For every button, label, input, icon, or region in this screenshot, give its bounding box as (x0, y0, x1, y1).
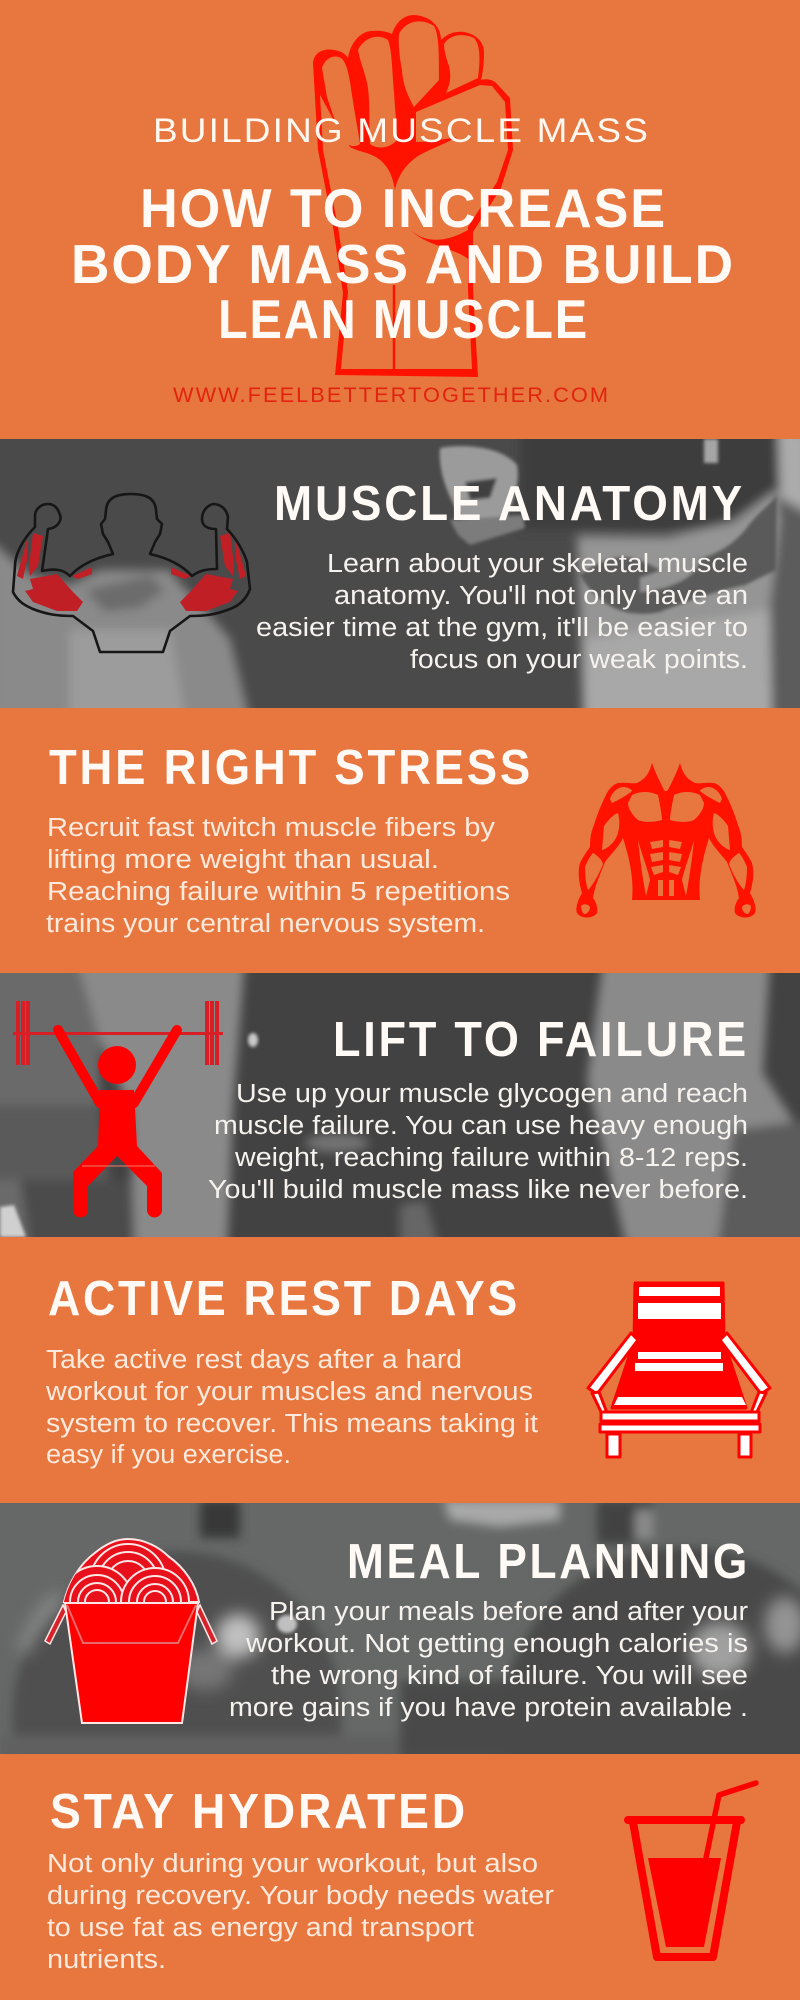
icon: raised fist (313, 15, 513, 377)
heading: ACTIVE REST DAYS (48, 1272, 520, 1326)
body text: Plan your meals before and after your (269, 1598, 749, 1626)
panel: meal planning (0, 1503, 800, 1754)
title: BODY MASS AND BUILD (71, 233, 735, 295)
body text (47, 1850, 555, 1974)
body text: weight, reaching failure within 8-12 reps. (234, 1144, 748, 1172)
body text: focus on your weak points. (410, 646, 748, 674)
body text: during recovery. Your body needs water (47, 1882, 555, 1910)
body text: Recruit fast twitch muscle fibers by (47, 814, 495, 842)
body text: lifting more weight than usual. (47, 846, 439, 874)
body text (45, 1346, 538, 1469)
icon: red bodybuilder (576, 763, 756, 918)
body text (229, 1598, 749, 1722)
background photo: gym shirt (0, 439, 800, 708)
body text: muscle failure. You can use heavy enough (214, 1112, 748, 1140)
body text (46, 814, 510, 938)
panel: the right stress (46, 741, 756, 938)
body text: more gains if you have protein available . (229, 1694, 748, 1722)
body text: workout for your muscles and nervous (45, 1378, 533, 1406)
heading: THE RIGHT STRESS (49, 741, 533, 795)
body text: workout. Not getting enough calories is (245, 1630, 748, 1658)
body text: system to recover. This means taking it (46, 1410, 538, 1438)
body text: Use up your muscle glycogen and reach (236, 1080, 748, 1108)
heading: MEAL PLANNING (347, 1535, 750, 1589)
icon: lounge chair (588, 1283, 770, 1457)
icon: muscular torso outline with red arms (13, 494, 250, 652)
panel: header (71, 15, 735, 407)
background photo: kettlebells (0, 1503, 800, 1754)
body text: the wrong kind of failure. You will see (271, 1662, 748, 1690)
heading: STAY HYDRATED (50, 1785, 468, 1839)
title (71, 177, 735, 350)
panel: muscle anatomy (0, 425, 800, 720)
body text: to use fat as energy and transport (47, 1914, 474, 1942)
heading: MUSCLE ANATOMY (274, 477, 745, 531)
title: HOW TO INCREASE (140, 177, 667, 239)
body text: Take active rest days after a hard (46, 1346, 462, 1374)
body text: easy if you exercise. (46, 1441, 291, 1469)
heading: LIFT TO FAILURE (333, 1013, 749, 1067)
body text (256, 550, 748, 674)
body text: anatomy. You'll not only have an (334, 582, 748, 610)
body text (208, 1080, 748, 1204)
body text: nutrients. (47, 1946, 166, 1974)
website url: WWW.FEELBETTERTOGETHER.COM (173, 384, 610, 407)
body text: Reaching failure within 5 repetitions (47, 878, 510, 906)
subtitle: BUILDING MUSCLE MASS (153, 112, 650, 150)
body text: Not only during your workout, but also (47, 1850, 538, 1878)
body text: Learn about your skeletal muscle (327, 550, 748, 578)
panel: active rest days (45, 1272, 770, 1469)
background photo: legs (0, 973, 800, 1237)
icon: noodle box (45, 1539, 217, 1723)
panel: stay hydrated (47, 1783, 756, 1974)
title: LEAN MUSCLE (218, 288, 589, 350)
icon: drink with straw (628, 1783, 756, 1957)
body text: easier time at the gym, it'll be easier to (256, 614, 748, 642)
body text: You'll build muscle mass like never before. (208, 1176, 748, 1204)
panel: lift to failure (0, 960, 800, 1250)
icon: red weightlifter (13, 1001, 223, 1218)
body text: trains your central nervous system. (46, 910, 485, 938)
